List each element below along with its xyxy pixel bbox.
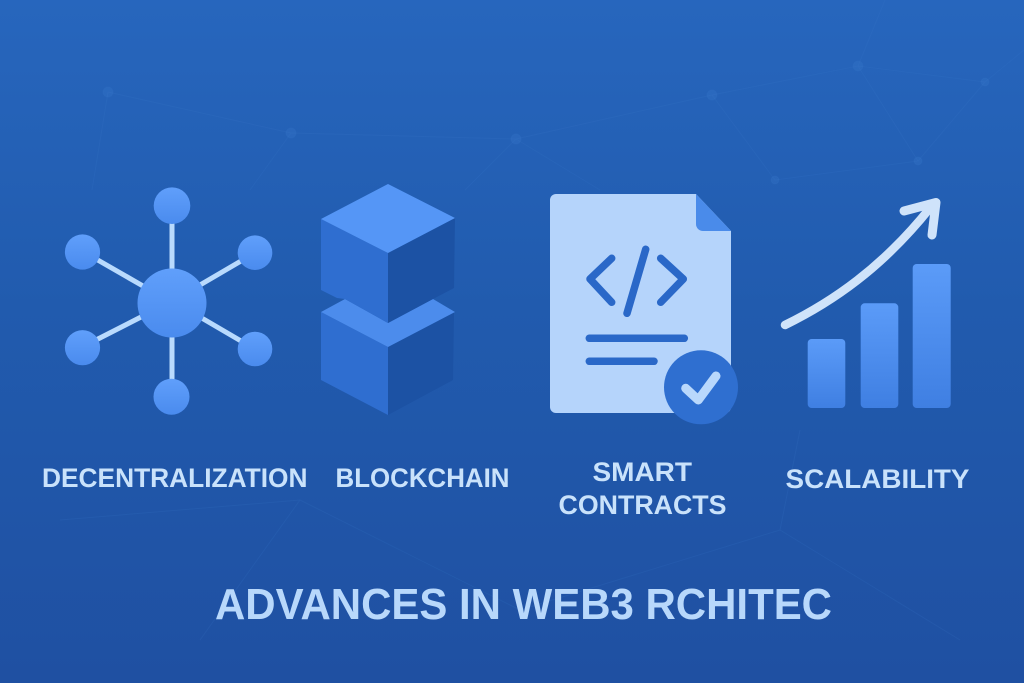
label: scalability: SCALABILITY: [786, 464, 970, 494]
title: ADVANCES IN WEB3 RCHITEC: [215, 580, 832, 629]
label: blockchain: BLOCKCHAIN: [336, 463, 510, 493]
label: smart contracts: CONTRACTS: [558, 490, 726, 520]
icon: blockchain cubes: [321, 184, 455, 415]
icon: smart contract document: [550, 194, 738, 424]
growth arrow: [785, 202, 936, 325]
code symbol: [589, 249, 684, 361]
verified badge: [664, 350, 738, 424]
label: smart contracts: SMART: [592, 457, 693, 487]
icon: decentralization network: [65, 187, 272, 415]
label: decentralization: DECENTRALIZATION: [42, 463, 308, 493]
label: smart contracts: [558, 457, 726, 520]
icon: scalability chart: [785, 202, 951, 408]
